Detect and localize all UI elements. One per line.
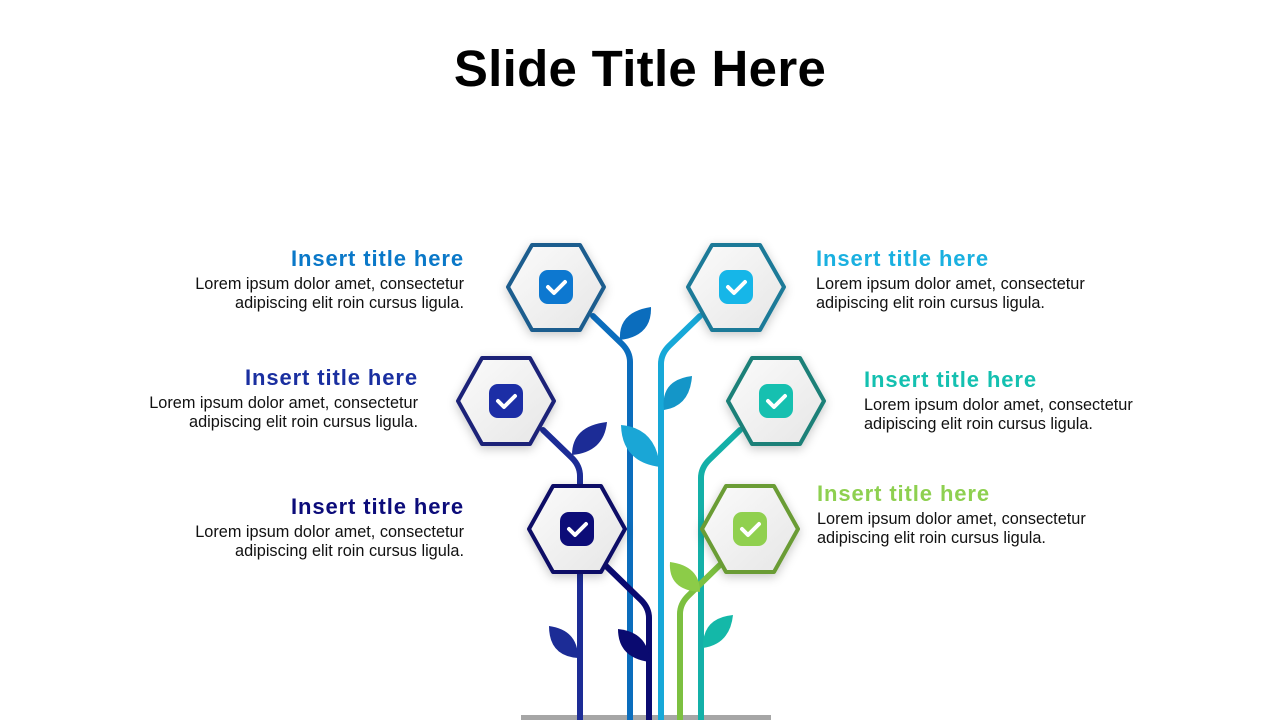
text: left 1 <box>195 246 464 312</box>
text: left 3: Insert title here <box>291 494 464 519</box>
text: left 1: Insert title here <box>291 246 464 271</box>
text: right 1 <box>816 246 1085 312</box>
text: left 3: Lorem ipsum dolor amet, consectetur <box>195 523 464 541</box>
text: left 2: Insert title here <box>245 365 418 390</box>
text: right 1: Lorem ipsum dolor amet, consectetur <box>816 275 1085 293</box>
text: left 1: adipiscing elit roin cursus ligula. <box>235 294 464 312</box>
title: Slide Title Here <box>454 40 826 97</box>
hexagon 4 <box>728 358 824 444</box>
text: left 3 <box>195 494 464 560</box>
hexagon 6 <box>702 486 798 572</box>
hexagon 2 <box>688 245 784 330</box>
text: right 1: adipiscing elit roin cursus ligula. <box>816 294 1045 312</box>
text: left 2 <box>149 365 418 431</box>
hexagon 3 <box>458 358 554 444</box>
text: left 2: adipiscing elit roin cursus ligula. <box>189 413 418 431</box>
text: right 3: adipiscing elit roin cursus ligula. <box>817 529 1046 547</box>
text: left 2: Lorem ipsum dolor amet, consectetur <box>149 394 418 412</box>
text: right 2 <box>864 367 1133 433</box>
stems <box>543 316 740 720</box>
leaves <box>549 307 733 662</box>
text: left 1: Lorem ipsum dolor amet, consectetur <box>195 275 464 293</box>
text: right 2: adipiscing elit roin cursus ligula. <box>864 415 1093 433</box>
hexagon 5 <box>529 486 625 572</box>
text: right 2: Lorem ipsum dolor amet, consectetur <box>864 396 1133 414</box>
text: right 3 <box>817 481 1086 547</box>
base bar <box>521 715 771 720</box>
hexagon 1 <box>508 245 604 330</box>
text: right 2: Insert title here <box>864 367 1037 392</box>
text: right 1: Insert title here <box>816 246 989 271</box>
text: right 3: Lorem ipsum dolor amet, consectetur <box>817 510 1086 528</box>
text: right 3: Insert title here <box>817 481 990 506</box>
text: left 3: adipiscing elit roin cursus ligula. <box>235 542 464 560</box>
